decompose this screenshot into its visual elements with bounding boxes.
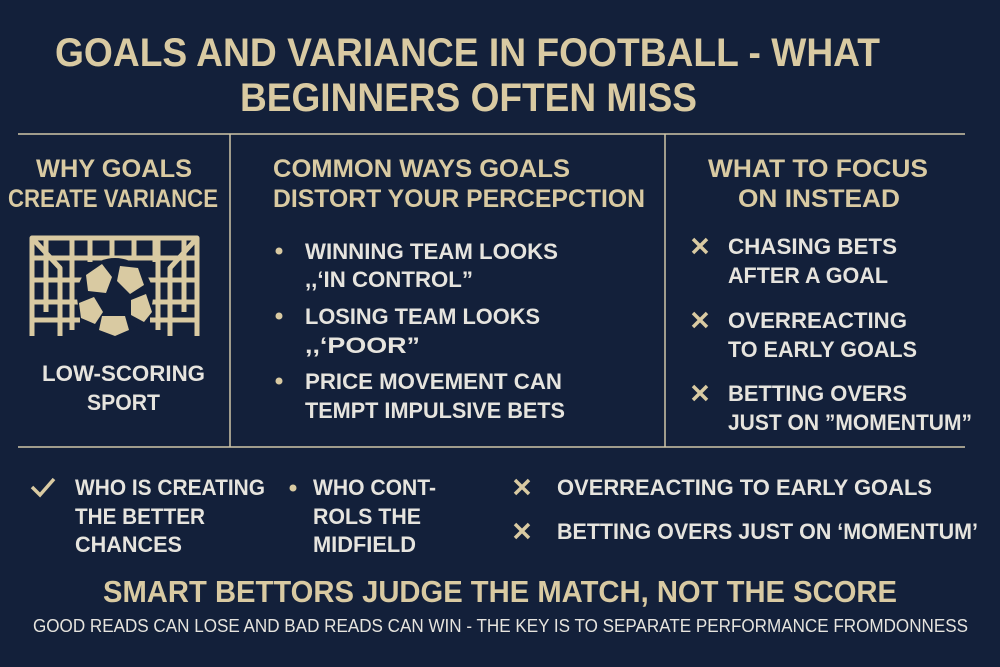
list: focus items: OVERREACTING — [728, 308, 907, 333]
title: BEGINNERS OFTEN MISS — [240, 76, 697, 120]
icon: goal with ball — [32, 238, 197, 336]
list: focus items: JUST ON ”MOMENTUM” — [728, 410, 972, 435]
bottom row: checklist: OVERREACTING TO EARLY GOALS — [557, 475, 932, 500]
list: distortions: WINNING TEAM LOOKS — [305, 239, 558, 264]
bottom row: checklist: MIDFIELD — [313, 532, 416, 557]
list: focus items: BETTING OVERS — [728, 381, 907, 406]
list: focus items: TO EARLY GOALS — [728, 337, 917, 362]
list: distortions — [276, 239, 565, 423]
list: distortions: PRICE MOVEMENT CAN — [305, 369, 562, 394]
heading: focus: WHAT TO FOCUS — [708, 155, 928, 183]
heading: why goals: CREATE VARIANCE — [8, 185, 218, 213]
heading: distort perception: DISTORT YOUR PERCEPCTION — [273, 185, 645, 213]
panel: what to focus on instead — [693, 155, 972, 435]
title: GOALS AND VARIANCE IN FOOTBALL - WHAT — [55, 31, 880, 75]
text: low-scoring sport — [42, 361, 205, 415]
title — [55, 31, 880, 120]
list: distortions: TEMPT IMPULSIVE BETS — [305, 398, 565, 423]
panel: common ways goals distort perception — [273, 155, 645, 423]
bottom row: checklist: ROLS THE — [313, 504, 421, 529]
bottom row: checklist: WHO IS CREATING — [75, 475, 265, 500]
heading: why goals: WHY GOALS — [36, 155, 192, 183]
text: low-scoring sport: SPORT — [87, 390, 161, 415]
heading: why goals — [8, 155, 218, 213]
list: distortions: ,,‘POOR” — [305, 333, 420, 358]
heading: distort perception: COMMON WAYS GOALS — [273, 155, 570, 183]
panel: why goals create variance — [8, 155, 218, 415]
list: distortions: LOSING TEAM LOOKS — [305, 304, 540, 329]
heading: focus — [708, 155, 928, 213]
list: focus items: AFTER A GOAL — [728, 263, 888, 288]
text: low-scoring sport: LOW-SCORING — [42, 361, 205, 386]
bottom row: checklist: BETTING OVERS JUST ON ‘MOMENTUM’ — [557, 519, 978, 544]
icon: check — [32, 479, 54, 495]
list: distortions: ,,‘IN CONTROL” — [305, 267, 473, 292]
list: focus items: CHASING BETS — [728, 234, 897, 259]
heading: focus: ON INSTEAD — [738, 185, 900, 213]
subtitle: GOOD READS CAN LOSE AND BAD READS CAN WIN - THE KEY IS TO SEPARATE PERFORMANCE FROMDONNESS — [33, 616, 968, 636]
bottom row: checklist: THE BETTER — [75, 504, 205, 529]
bottom row: checklist: CHANCES — [75, 532, 182, 557]
list: focus items — [693, 234, 972, 435]
bottom row: checklist: WHO CONT- — [313, 475, 436, 500]
bottom row: checklist — [32, 475, 978, 557]
heading: distort perception — [273, 155, 645, 213]
callout: smart bettors: SMART BETTORS JUDGE THE MATCH, NOT THE SCORE — [103, 574, 897, 609]
